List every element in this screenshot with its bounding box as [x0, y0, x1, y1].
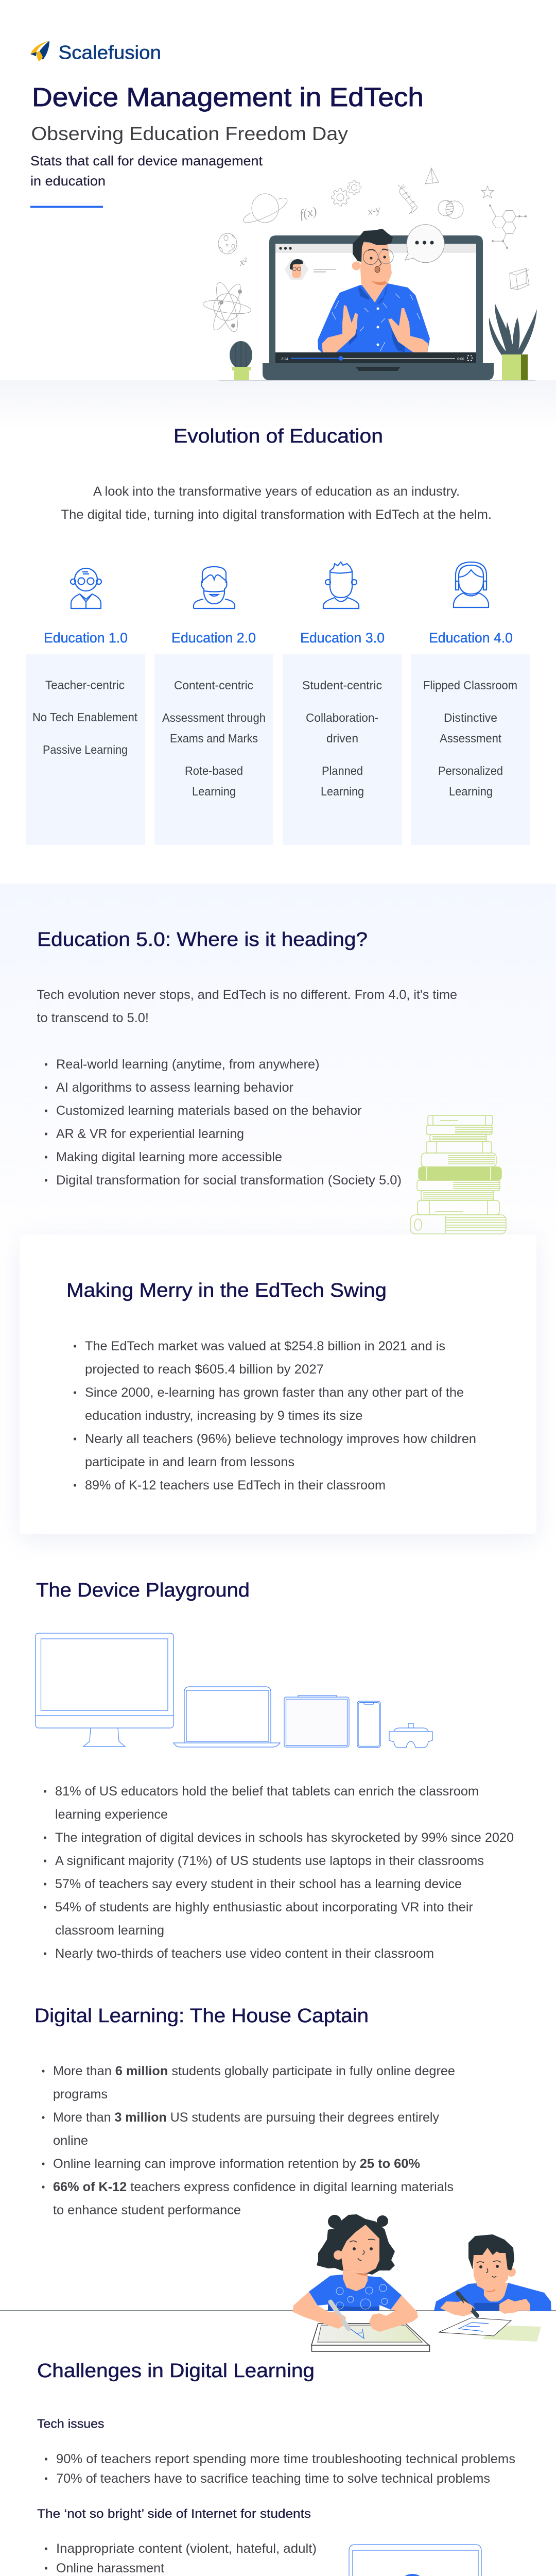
- card: Education 3.0 traits: driven: [326, 732, 358, 745]
- label: Education 4.0: Education 4.0: [429, 630, 513, 646]
- list: device stats: 54% of students are highly enthusiastic about incorporating VR into their: [55, 1900, 473, 1914]
- list: digital learning stats: to enhance student performance: [53, 2203, 241, 2217]
- card: Education 4.0 traits: Flipped Classroom: [423, 679, 517, 692]
- illustration: monitor: 6:00: [457, 358, 464, 361]
- card: Education 1.0 traits: Teacher-centric: [45, 679, 125, 692]
- icon: laptop: [173, 1687, 280, 1747]
- tagline: in education: [30, 173, 106, 189]
- subtitle: Observing Education Freedom Day: [31, 123, 349, 144]
- list: market stats: education industry, increasing by 9 times its size: [85, 1409, 362, 1423]
- list: market stats: participate in and learn from lessons: [85, 1455, 294, 1469]
- card: Education 3.0 traits: Collaboration-: [306, 711, 378, 724]
- list: internet risks: Online harassment: [56, 2561, 164, 2575]
- icon: stack of books: [410, 1115, 506, 1234]
- list: market stats: The EdTech market was valued at $254.8 billion in 2021 and is: [85, 1339, 445, 1353]
- icon: person with headphones: [454, 562, 489, 607]
- icon: bearded person: [194, 567, 235, 608]
- list: market stats: [74, 1339, 476, 1493]
- heading: Making Merry: Making Merry in the EdTech Swing: [66, 1280, 387, 1301]
- intro text: [61, 484, 492, 522]
- card: Education 4.0 traits: Assessment: [440, 732, 502, 745]
- label: Education 3.0: Education 3.0: [300, 630, 385, 646]
- heading: Education 5.0: Education 5.0: Where is it heading?: [37, 929, 368, 951]
- card: Education 2.0 traits: Learning: [192, 785, 236, 798]
- card: Education 2.0 traits: [154, 654, 273, 845]
- icon: elderly teacher: [71, 568, 101, 608]
- doodles: grey science icons: [202, 168, 529, 334]
- heading: Challenges: Challenges in Digital Learning: [37, 2360, 315, 2382]
- list: tech issues: [45, 2452, 515, 2486]
- heading: Evolution of Education: Evolution of Education: [173, 426, 383, 447]
- section background: Education 5.0: [0, 884, 556, 1239]
- icon: desktop monitor: [36, 1633, 173, 1747]
- list: market stats: projected to reach $605.4 billion by 2027: [85, 1362, 324, 1377]
- panel: Education 2.0: [154, 567, 273, 845]
- card: Education 1.0 traits: [26, 654, 145, 845]
- accent bar: [30, 206, 103, 208]
- card: Education 1.0 traits: Passive Learning: [43, 743, 128, 756]
- list: device stats: learning experience: [55, 1807, 168, 1822]
- list: digital learning stats: 66% of K-12 teachers express confidence in digital learning materials: [53, 2180, 454, 2194]
- list: digital learning stats: Online learning can improve information retention by 25 to 60%: [53, 2157, 420, 2171]
- list: internet risks: Inappropriate content (violent, hateful, adult): [56, 2541, 317, 2556]
- list: tech issues: 70% of teachers have to sacrifice teaching time to solve technical problems: [56, 2471, 490, 2486]
- title: Device Management in EdTech: [32, 82, 424, 112]
- subheading: Tech issues: Tech issues: [37, 2417, 104, 2431]
- subheading: not so bright side: The ‘not so bright’ side of Internet for students: [37, 2507, 311, 2521]
- icon: student spiky hair: [323, 562, 359, 608]
- list: digital learning stats: [42, 2064, 455, 2217]
- logo: Scalefusion: Scalefusion: [59, 42, 161, 63]
- card: Education 2.0 traits: Exams and Marks: [170, 732, 258, 745]
- heading: The Device Playground: The Device Playground: [36, 1580, 250, 1601]
- list: digital learning stats: programs: [53, 2087, 108, 2102]
- list: device stats: The integration of digital devices in schools has skyrocketed by 99% since 2020: [55, 1831, 514, 1845]
- doodles: grey science icons: f(x): [299, 205, 318, 222]
- card: Education 1.0 traits: No Tech Enablement: [32, 710, 138, 724]
- card: Education 2.0 traits: Rote-based: [185, 764, 243, 777]
- list: market stats: Since 2000, e-learning has grown faster than any other part of the: [85, 1385, 464, 1400]
- icon: tablet: [284, 1696, 349, 1747]
- icon: phone: [357, 1701, 380, 1748]
- list: Education 5.0 features: [45, 1057, 402, 1188]
- list: Education 5.0 features: Real-world learning (anytime, from anywhere): [56, 1057, 319, 1072]
- list: device stats: 81% of US educators hold the belief that tablets can enrich the classroom: [55, 1784, 479, 1799]
- illustration: boy with paper: [434, 2234, 551, 2342]
- card: Education 2.0 traits: Content-centric: [174, 679, 253, 692]
- list: digital learning stats: More than 6 million students globally participate in fully online degree: [53, 2064, 455, 2078]
- icon row: devices: [36, 1633, 432, 1748]
- icon: blocked laptop: [334, 2545, 496, 2576]
- illustration: monitor: 2:14: [281, 358, 288, 361]
- icon: VR headset: [389, 1723, 432, 1748]
- list: Education 5.0 features: Making digital learning more accessible: [56, 1150, 282, 1164]
- card: Education 3.0 traits: Student-centric: [302, 679, 382, 692]
- list: Education 5.0 features: Digital transformation for social transformation (Society 5.0): [56, 1173, 402, 1188]
- tagline: Stats that call for device management: [30, 153, 263, 168]
- heading: Digital Learning: Digital Learning: The House Captain: [34, 2005, 369, 2027]
- speech bubble: [405, 225, 444, 263]
- illustration: presenter: [318, 229, 430, 352]
- panel: EdTech market stats: [20, 1234, 536, 1534]
- illustration: cactus: [230, 341, 252, 380]
- panel: Education 4.0: [411, 562, 530, 845]
- list: market stats: 89% of K-12 teachers use EdTech in their classroom: [85, 1478, 386, 1493]
- list: tech issues: 90% of teachers report spending more time troubleshooting technical problems: [56, 2452, 515, 2466]
- card: Education 3.0 traits: Learning: [321, 785, 364, 798]
- list: digital learning stats: online: [53, 2133, 88, 2148]
- list: device stats: [44, 1784, 514, 1961]
- card: Education 4.0 traits: Learning: [449, 785, 493, 798]
- intro text: A look into the transformative years of education as an industry.: [93, 484, 460, 499]
- card: Education 3.0 traits: Planned: [322, 764, 363, 777]
- card shadow: [20, 1240, 536, 1539]
- list: Education 5.0 features: AR & VR for experiential learning: [56, 1127, 244, 1141]
- text: tech evolution intro: to transcend to 5.0!: [37, 1011, 149, 1025]
- card: Education 4.0 traits: Personalized: [438, 764, 503, 777]
- label: Education 2.0: Education 2.0: [171, 630, 256, 646]
- panel: Education 1.0: [26, 568, 145, 845]
- desk line: [0, 2310, 556, 2311]
- list: device stats: classroom learning: [55, 1923, 164, 1938]
- list: device stats: Nearly two-thirds of teachers use video content in their classroom: [55, 1946, 434, 1961]
- list: internet risks: [45, 2541, 317, 2576]
- section background: hero fade: [0, 380, 556, 429]
- intro text: The digital tide, turning into digital transformation with EdTech at the helm.: [61, 507, 492, 522]
- list: Education 5.0 features: AI algorithms to assess learning behavior: [56, 1080, 293, 1095]
- card: Education 3.0 traits: [283, 654, 402, 845]
- list: market stats: Nearly all teachers (96%) believe technology improves how children: [85, 1432, 476, 1446]
- illustration: monitor: [263, 235, 494, 380]
- panel: Education 3.0: [283, 562, 402, 845]
- illustration: girl at tablet: [292, 2214, 429, 2351]
- card: Education 4.0 traits: [411, 654, 530, 845]
- illustration: potted plant: [489, 303, 537, 380]
- doodles: grey science icons: x²: [238, 255, 249, 268]
- text: tech evolution intro: [37, 988, 457, 1025]
- card: Education 4.0 traits: Distinctive: [444, 711, 497, 724]
- doodles: grey science icons: x-y: [366, 204, 381, 218]
- card: Education 2.0 traits: Assessment through: [162, 711, 266, 724]
- list: device stats: A significant majority (71%) of US students use laptops in their classrooms: [55, 1854, 484, 1868]
- ground line: [219, 380, 535, 381]
- text: tech evolution intro: Tech evolution never stops, and EdTech is no different. From 4.0, it's time: [37, 988, 457, 1002]
- tagline: [30, 153, 263, 189]
- list: device stats: 57% of teachers say every student in their school has a learning device: [55, 1877, 462, 1891]
- label: Education 1.0: Education 1.0: [44, 630, 128, 646]
- list: Education 5.0 features: Customized learning materials based on the behavior: [56, 1104, 361, 1118]
- list: digital learning stats: More than 3 million US students are pursuing their degrees entirely: [53, 2110, 439, 2125]
